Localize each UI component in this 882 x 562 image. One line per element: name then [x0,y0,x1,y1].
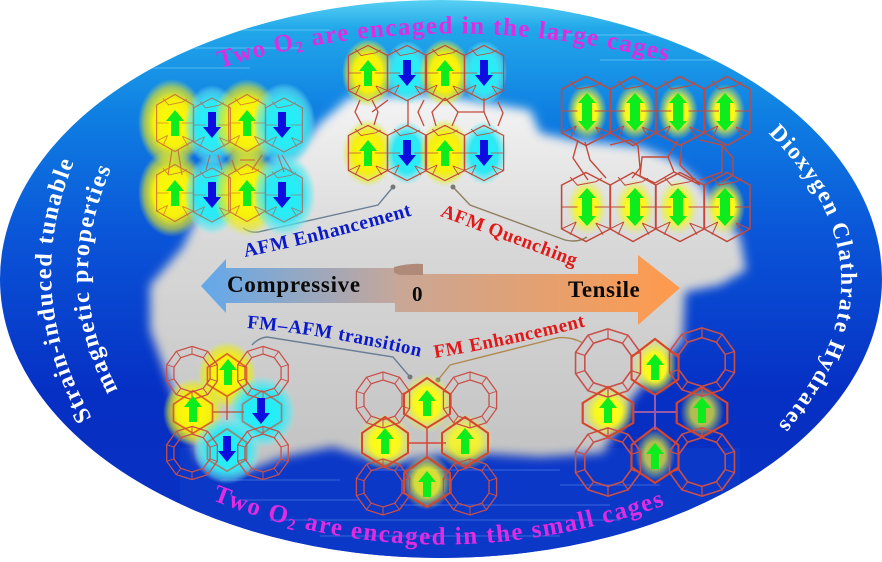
structure: bottom centre FM [356,372,497,515]
heading: small cages: 2 [286,518,296,530]
structure: bottom right FM [576,328,734,496]
tensile arrow [395,255,680,325]
side text: dioxygen clathrate hydrates: Dioxygen Clathrate Hydrates [768,122,858,432]
cages [157,94,302,222]
spin arrows [184,359,270,462]
spin arrows [599,354,711,469]
label: compressive: Compressive [227,272,361,297]
zero cap [394,264,423,275]
cages [576,328,734,496]
glow [582,339,724,481]
cages [348,45,504,181]
glow [342,39,507,187]
spin arrows [376,390,474,497]
cages [167,346,288,480]
label: FM-AFM transition: FM–AFM transition [247,316,420,357]
label: AFM Enhancement: AFM Enhancement [244,206,412,257]
spin arrows [578,93,734,226]
side text: strain-induced line 2: magnetic properties [74,166,118,394]
structure: top centre AFM [342,39,507,187]
spin arrows [166,110,291,208]
glow [163,341,296,484]
structure: top right AFM quenched [562,76,750,242]
label: tensile: Tensile [568,277,640,302]
glow [138,79,316,237]
sea water [110,30,760,562]
compressive arrow [201,259,395,313]
glow [357,373,493,510]
cages [562,76,750,242]
heading: small cages: Two O [216,484,288,522]
glow [567,84,745,235]
side text: strain-induced line 1: Strain-induced tunable [34,160,91,423]
label: FM Enhancement: FM Enhancement [433,316,586,358]
cloud [150,95,746,470]
heading: large cages: are encaged in the large cages [312,16,668,60]
structure: top left compressed AFM [138,79,316,237]
connectors [243,184,587,382]
spin arrows [359,60,493,166]
heading: small cages: are encaged in the small cages [306,495,664,550]
structure: bottom left FM-AFM [163,341,296,484]
cages [356,372,497,515]
strain arrow [201,255,680,325]
heading: large cages: Two O [216,34,292,67]
label: zero: 0 [412,282,422,306]
heading: large cages: 2 [296,42,304,53]
label: AFM Quenching: AFM Quenching [440,206,578,269]
